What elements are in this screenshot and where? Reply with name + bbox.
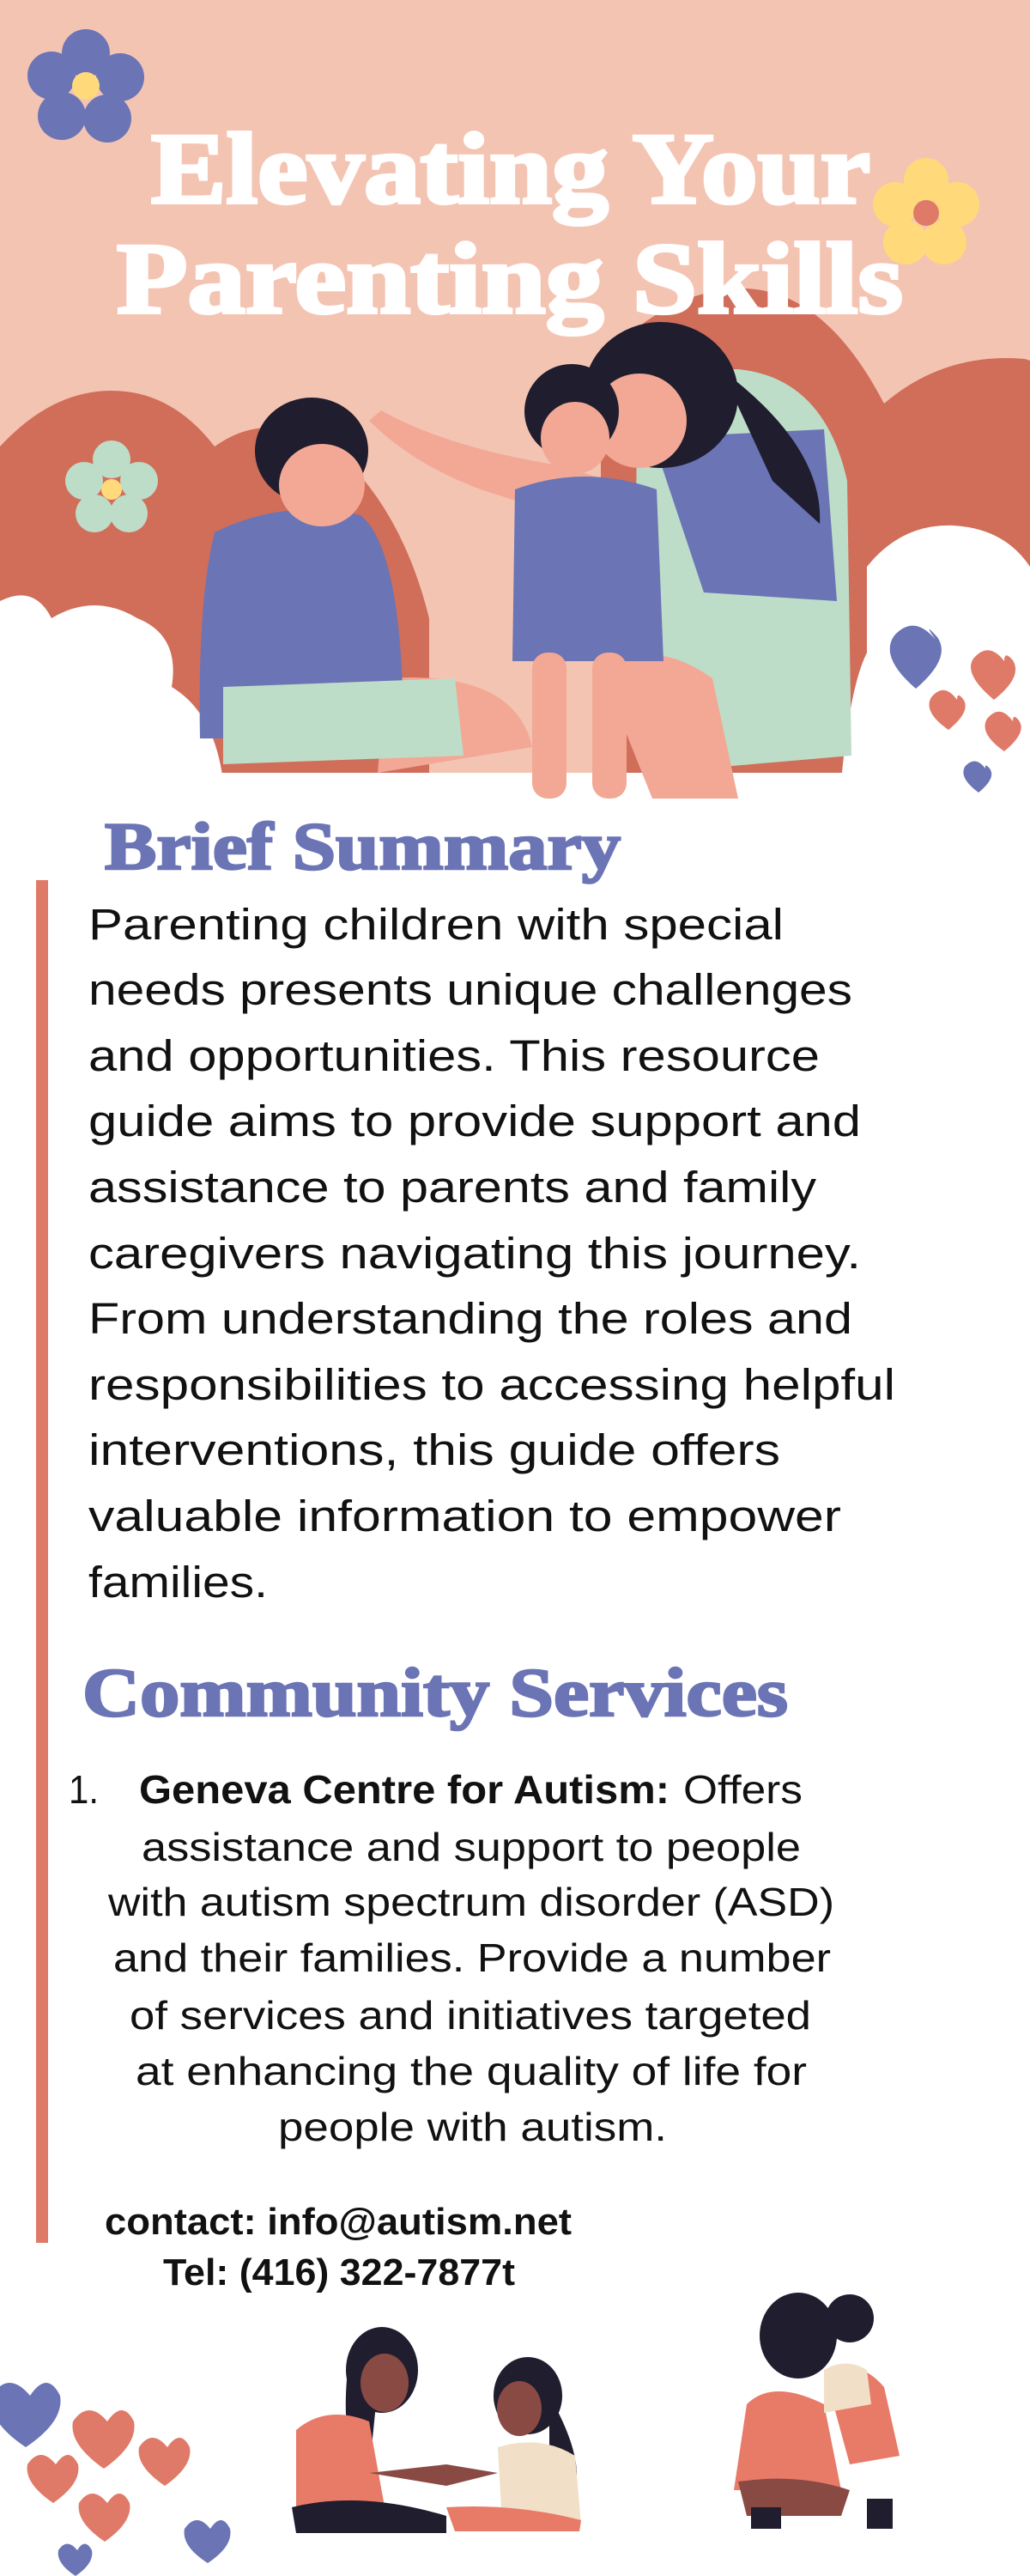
text block: Geneva Centre list item: of services and initiatives targeted [130, 1993, 811, 2038]
text block: Geneva Centre list item: and their families. Provide a number [113, 1935, 831, 1980]
text block: Geneva Centre list item: Offers [683, 1767, 803, 1812]
text block: summary: Parenting children with special [88, 900, 784, 949]
icon: green flower [65, 440, 158, 532]
title [117, 112, 903, 335]
mother [369, 322, 851, 799]
hearts bottom left [0, 2383, 230, 2576]
text block: summary: valuable information to empower [88, 1492, 841, 1540]
text block: Geneva Centre list item: 1. [69, 1767, 99, 1812]
text block: summary: families. [88, 1558, 268, 1607]
title: Parenting Skills [117, 222, 903, 335]
illustration: parent with two children [200, 322, 851, 799]
text block: Geneva Centre list item: at enhancing the quality of life for [136, 2049, 807, 2093]
text block: Geneva Centre list item: people with autism. [278, 2105, 667, 2149]
text block: Geneva Centre list item [69, 1767, 834, 2149]
girl [512, 364, 663, 799]
heading: Brief Summary: Brief Summary [105, 809, 621, 884]
text block: summary: needs presents unique challenges [88, 965, 852, 1014]
heading: Community Services: Community Services [82, 1656, 788, 1731]
text block: summary: and opportunities. This resource [88, 1031, 820, 1080]
contact info [105, 2201, 572, 2293]
text block: Geneva Centre list item: Geneva Centre for Autism: [139, 1767, 670, 1812]
hero background [0, 0, 1030, 783]
accent bar [36, 880, 48, 2243]
contact info: Tel: (416) 322-7877t [163, 2251, 515, 2293]
contact info: contact: info@autism.net [105, 2201, 572, 2243]
boy [200, 398, 532, 773]
icon: yellow flower [873, 158, 979, 264]
text block: summary: interventions, this guide offers [88, 1425, 780, 1474]
text block: summary: responsibilities to accessing helpful [88, 1360, 895, 1409]
title: Elevating Your [151, 112, 870, 225]
text block: summary: From understanding the roles and [88, 1294, 852, 1343]
icon: purple flower [27, 29, 144, 143]
text block: summary: caregivers navigating this journey. [88, 1229, 861, 1278]
illustration: mother hugging child [734, 2293, 900, 2529]
illustration: mother and daughter holding hands [292, 2327, 581, 2533]
text block: summary: guide aims to provide support and [88, 1097, 861, 1145]
text block: Geneva Centre list item: assistance and support to people [142, 1825, 801, 1869]
hearts top right [890, 626, 1021, 793]
text block: summary: assistance to parents and family [88, 1163, 817, 1212]
text block: summary [88, 900, 895, 1607]
text block: Geneva Centre list item: with autism spectrum disorder (ASD) [107, 1880, 834, 1924]
